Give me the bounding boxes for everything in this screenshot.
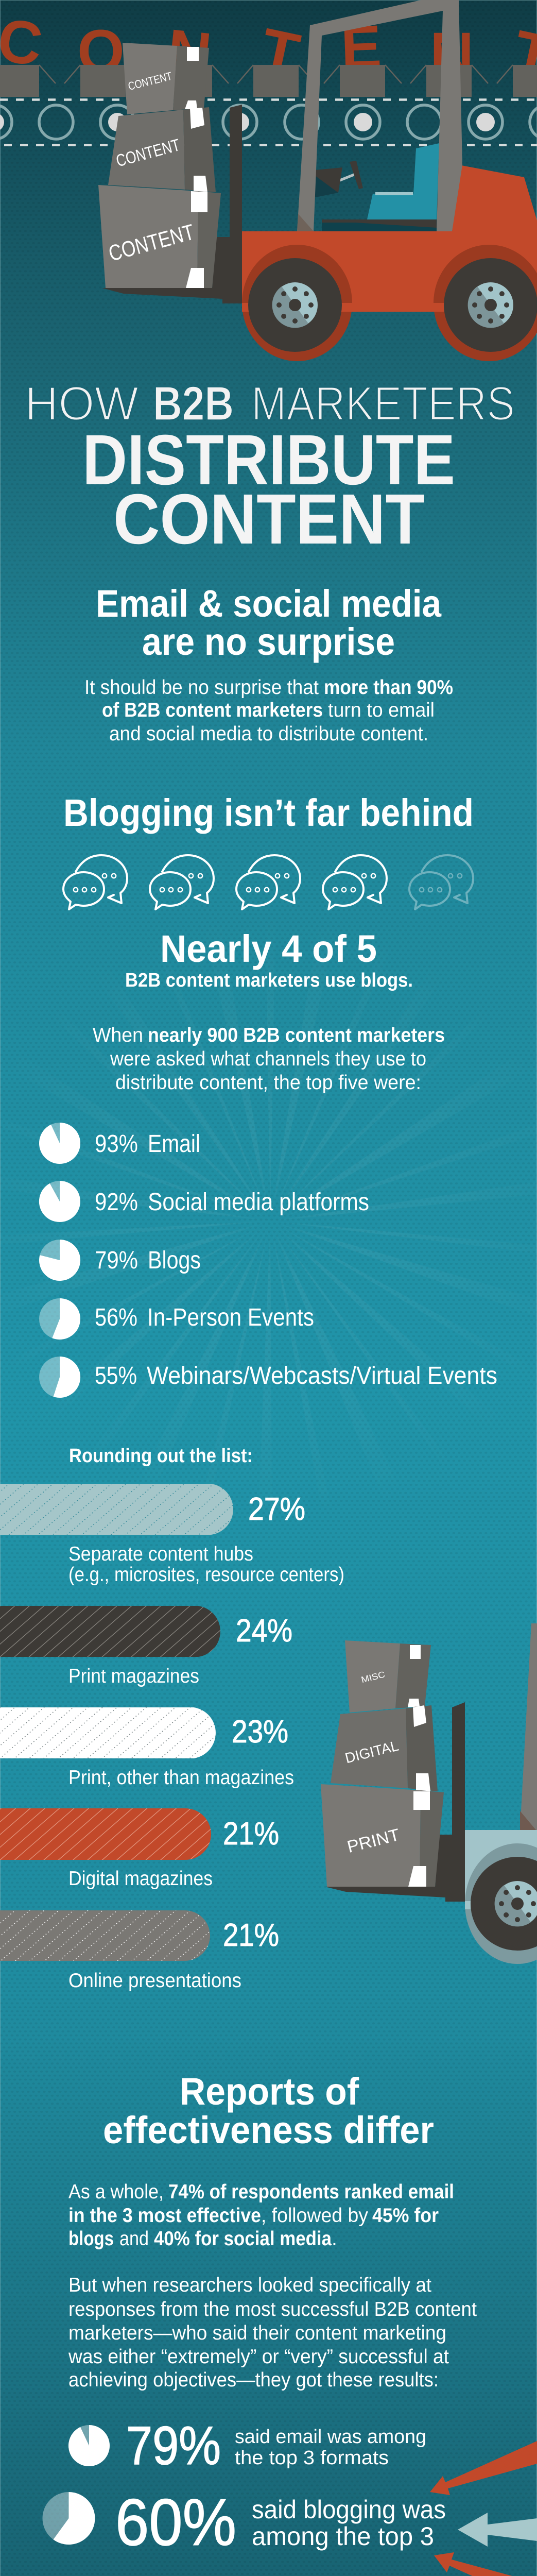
steering wheel xyxy=(315,161,363,197)
text block: no surprise: and social media to distribute content. xyxy=(109,723,428,745)
stat: 79 percent email: the top 3 formats xyxy=(235,2447,389,2469)
stat: nearly 4 of 5: Nearly 4 of 5 xyxy=(160,927,377,970)
stack of content boxes xyxy=(98,43,221,288)
title: CONTENT xyxy=(113,480,425,559)
box stack xyxy=(321,1640,444,1887)
bar: separate content hubs: (e.g., microsites, resource centers) xyxy=(68,1564,344,1586)
top five channels list: Blogs xyxy=(148,1247,201,1274)
stat: 79 percent email xyxy=(68,2416,426,2476)
second forklift with misc digital print boxes xyxy=(321,1623,537,1964)
fork and column xyxy=(325,1702,465,1902)
bar: print other than magazines: 23% xyxy=(232,1714,288,1750)
bar: print other than magazines: Print, other than magazines xyxy=(68,1767,294,1789)
top five channels list: 93% xyxy=(95,1130,138,1158)
pie: 55 percent xyxy=(39,1357,80,1398)
text block: survey intro: When xyxy=(93,1024,143,1046)
text block: researchers: marketers—who said their content marketing xyxy=(68,2322,446,2344)
stat: 60 percent blogging: among the top 3 xyxy=(252,2522,434,2551)
forklift body xyxy=(242,165,537,312)
top five channels list: 92% xyxy=(95,1189,138,1216)
bar: online presentations: Online presentations xyxy=(68,1970,241,1992)
letters spelling content: T xyxy=(255,15,305,90)
text block: researchers: achieving objectives—they got these results: xyxy=(68,2369,439,2391)
forklift wheels xyxy=(248,258,342,352)
stat: 79 percent email: 79% xyxy=(126,2416,221,2476)
bar: online presentations xyxy=(0,1910,279,1992)
arrow: red upper xyxy=(430,2441,537,2495)
top five channels list: 55% xyxy=(95,1362,137,1389)
text block: no surprise: turn to email xyxy=(328,699,435,721)
text block: as a whole: , followed by xyxy=(261,2205,368,2227)
letters spelling content: O xyxy=(77,18,125,86)
bar: separate content hubs: 27% xyxy=(248,1492,305,1527)
stat: 60 percent blogging xyxy=(42,2486,446,2560)
bar: separate content hubs: Separate content hubs xyxy=(68,1543,253,1565)
top five channels list: Social media platforms xyxy=(148,1189,369,1216)
pie: 56 percent xyxy=(39,1298,80,1340)
pie: 92 percent xyxy=(39,1181,80,1222)
text block: as a whole: 45% for xyxy=(372,2205,439,2227)
title: DISTRIBUTE xyxy=(82,420,455,500)
top five channels list: 79% xyxy=(95,1247,138,1274)
text block: as a whole: blogs xyxy=(68,2228,114,2250)
text block: researchers xyxy=(68,2274,477,2391)
bar: digital magazines: 21% xyxy=(223,1816,279,1852)
conveyor belt with content letters xyxy=(0,6,537,145)
conveyor rollers xyxy=(0,105,537,139)
top five channels list xyxy=(39,1123,497,1398)
forklift carrying content boxes xyxy=(98,0,537,361)
box stack: DIGITAL xyxy=(343,1738,400,1766)
text block: no surprise: of B2B content marketers xyxy=(102,699,323,721)
bar: print magazines xyxy=(0,1606,292,1687)
text block: as a whole: 74% of respondents ranked email xyxy=(168,2181,454,2203)
text block: as a whole xyxy=(68,2181,454,2250)
wheel xyxy=(471,1857,537,1951)
text block: as a whole: and xyxy=(119,2228,149,2250)
forklift seat xyxy=(367,143,439,219)
heading: reports of effectiveness xyxy=(103,2070,434,2151)
text block: as a whole: in the 3 most effective xyxy=(68,2205,261,2227)
text block: as a whole: 40% for social media xyxy=(154,2228,332,2250)
box stack: PRINT xyxy=(345,1825,402,1856)
top five channels list: Email xyxy=(148,1130,200,1158)
pie: 79 percent xyxy=(39,1240,80,1281)
stack of content boxes: CONTENT xyxy=(114,135,182,171)
bar chart: other channels xyxy=(0,1484,344,1992)
stat: nearly 4 of 5: B2B content marketers use blogs. xyxy=(125,970,413,991)
title: B2B xyxy=(153,377,234,430)
box labels: MISC xyxy=(360,1669,386,1685)
text block: as a whole: As a whole, xyxy=(68,2181,164,2203)
forklift body pale xyxy=(465,1830,537,1909)
text block: survey intro xyxy=(93,1024,445,1094)
stack of content boxes: CONTENT xyxy=(106,220,197,266)
heading: reports of effectiveness: effectiveness differ xyxy=(103,2109,434,2151)
icon: speech bubbles 4 of 5 xyxy=(63,855,473,909)
row of open boxes xyxy=(0,65,537,97)
text block: survey intro: were asked what channels they use to xyxy=(110,1048,426,1070)
stat: 60 percent blogging: said blogging was xyxy=(252,2495,446,2524)
heading: email and social media: Email & social media xyxy=(96,582,442,625)
title: HOW xyxy=(25,377,138,430)
bar: print magazines: 24% xyxy=(236,1613,292,1649)
text block: no surprise: more than 90% xyxy=(324,676,453,699)
bar: print magazines: Print magazines xyxy=(68,1665,199,1687)
letters spelling content: E xyxy=(340,13,383,82)
top five channels list: In-Person Events xyxy=(147,1304,314,1331)
top five channels list: Webinars/Webcasts/Virtual Events xyxy=(147,1362,497,1389)
text block: researchers: responses from the most successful B2B content xyxy=(68,2298,477,2320)
text block: researchers: But when researchers looked specifically at xyxy=(68,2274,431,2296)
box labels: CONTENT xyxy=(127,70,174,93)
arrow: pale middle xyxy=(458,2513,537,2547)
text block: researchers: was either “extremely” or “very” successful at xyxy=(68,2346,449,2368)
heading: rounding out the list: Rounding out the list: xyxy=(69,1445,253,1467)
heading: reports of effectiveness: Reports of xyxy=(180,2070,359,2113)
heading: email and social media xyxy=(96,582,442,663)
text block: no surprise xyxy=(84,676,453,745)
text block: survey intro: distribute content, the top five were: xyxy=(115,1072,421,1094)
stat: nearly 4 of 5 xyxy=(125,927,413,991)
fork and lift column xyxy=(102,105,242,303)
arrow: red lower xyxy=(434,2552,537,2576)
title xyxy=(25,377,515,559)
bar: print other than magazines xyxy=(0,1707,294,1789)
bar: online presentations: 21% xyxy=(223,1918,279,1953)
top five channels list: 56% xyxy=(95,1304,137,1331)
text block: no surprise: It should be no surprise that xyxy=(84,676,319,699)
letters spelling content xyxy=(0,6,537,92)
heading: blogging: Blogging isn’t far behind xyxy=(63,791,474,834)
text block: as a whole: . xyxy=(332,2228,337,2250)
letters spelling content: N xyxy=(430,20,474,88)
text block: survey intro: nearly 900 B2B content marketers xyxy=(148,1024,445,1046)
stat: 79 percent email: said email was among xyxy=(235,2426,426,2448)
stat: 60 percent blogging: 60% xyxy=(115,2486,236,2560)
mast frame xyxy=(297,0,462,231)
letters spelling content: N xyxy=(164,16,215,89)
pie: 93 percent xyxy=(39,1123,80,1164)
bar: digital magazines: Digital magazines xyxy=(68,1868,213,1890)
bar: digital magazines xyxy=(0,1808,279,1890)
heading: email and social media: are no surprise xyxy=(142,620,395,663)
bar: separate content hubs xyxy=(0,1484,344,1586)
